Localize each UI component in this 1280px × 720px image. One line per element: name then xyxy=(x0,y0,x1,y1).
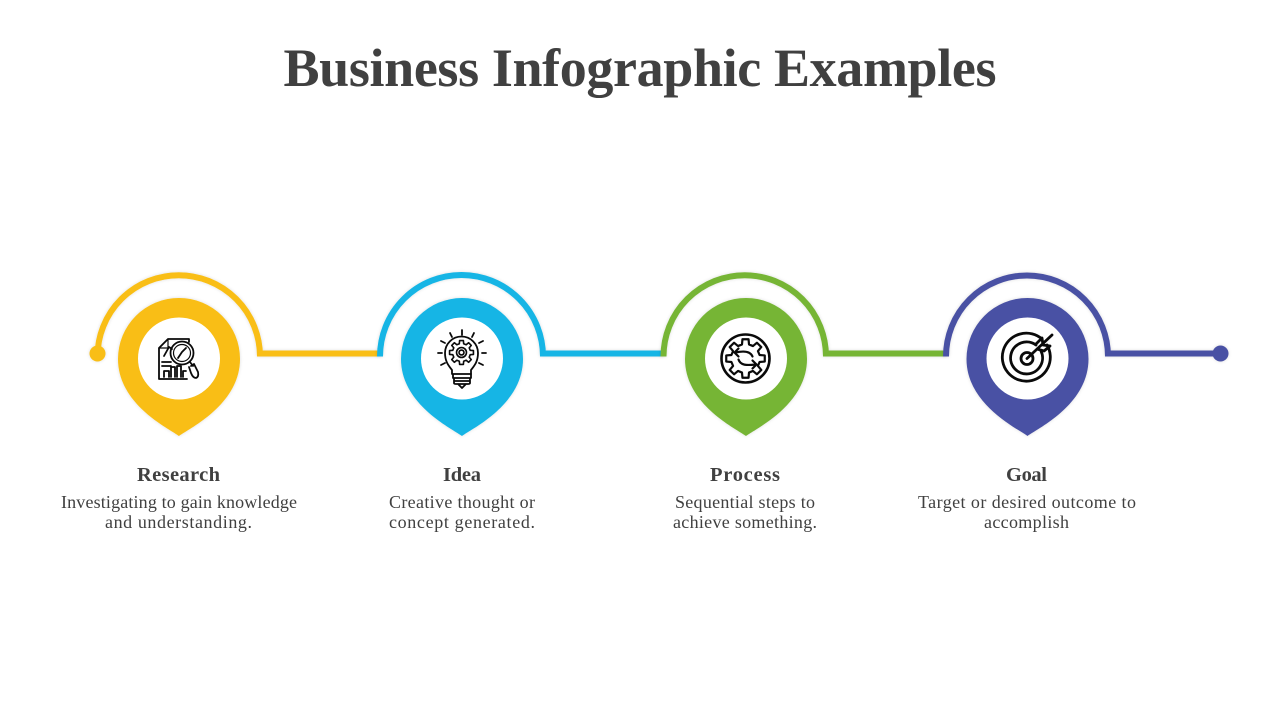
description: idea: concept generated. xyxy=(389,512,535,532)
pin: process xyxy=(685,298,807,436)
description: process xyxy=(673,492,817,532)
description: process: Sequential steps to xyxy=(675,492,815,512)
step 1: research xyxy=(61,275,380,532)
label: research: Research xyxy=(137,464,221,486)
description: idea: Creative thought or xyxy=(389,492,535,512)
title: Business Infographic Examples xyxy=(284,38,996,98)
connector arc: goal xyxy=(946,276,1228,362)
description: goal: accomplish xyxy=(984,512,1069,532)
description: research xyxy=(61,492,297,532)
step 4: goal xyxy=(918,276,1228,532)
connector arc: process xyxy=(664,275,946,356)
description: goal xyxy=(918,492,1136,532)
step 3: process xyxy=(664,275,946,532)
step 2: idea xyxy=(380,275,663,532)
icon: report with magnifier xyxy=(159,339,198,379)
pin: goal xyxy=(966,298,1088,436)
connector arc: idea xyxy=(380,275,663,356)
icon: light bulb with gear xyxy=(438,330,486,388)
pin hole: process xyxy=(705,318,787,400)
label: goal: Goal xyxy=(1006,464,1047,486)
pin: idea xyxy=(401,298,523,436)
description: research: Investigating to gain knowledge xyxy=(61,492,297,512)
pin hole: research xyxy=(138,318,220,400)
pin: research xyxy=(118,298,240,436)
icon: target with arrow xyxy=(1002,333,1052,381)
label: process: Process xyxy=(710,464,780,486)
label: idea: Idea xyxy=(443,464,481,486)
icon: gear with arrows xyxy=(722,334,770,382)
description: goal: Target or desired outcome to xyxy=(918,492,1136,512)
description: research: and understanding. xyxy=(105,512,252,532)
description: process: achieve something. xyxy=(673,512,817,532)
connector arc: research xyxy=(90,275,380,362)
pin hole: goal xyxy=(986,318,1068,400)
description: idea xyxy=(389,492,535,532)
pin hole: idea xyxy=(421,318,503,400)
